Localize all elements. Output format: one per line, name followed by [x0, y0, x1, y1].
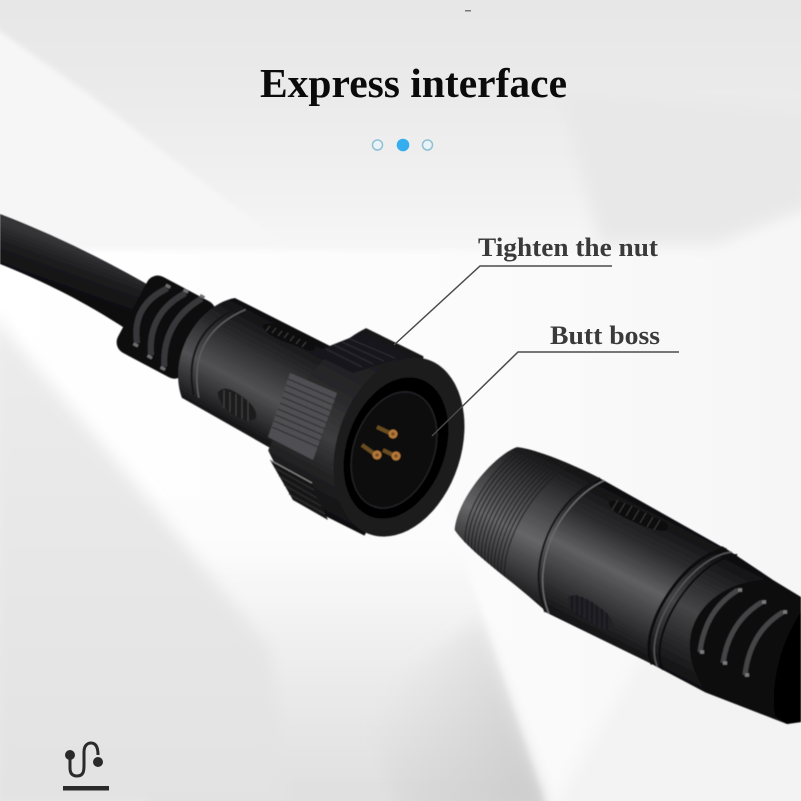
collar rings	[636, 535, 726, 671]
grip top	[609, 501, 668, 531]
nut face	[312, 340, 486, 554]
body grip top	[263, 324, 315, 351]
body grip bottom	[218, 389, 256, 421]
relief ribs	[700, 590, 783, 675]
relief base	[660, 556, 801, 724]
knurl top	[312, 333, 410, 373]
callout: butt boss	[432, 321, 679, 436]
pagination dots	[372, 139, 432, 151]
pins	[362, 427, 400, 460]
body	[516, 469, 729, 672]
callout: tighten the nut	[394, 233, 658, 345]
body	[159, 284, 363, 469]
strain relief	[112, 270, 220, 383]
title: Express interface	[260, 60, 567, 106]
callout: tighten the nut: Tighten the nut	[478, 233, 658, 262]
cable	[0, 214, 152, 329]
grip bottom	[568, 595, 614, 630]
right connector housing	[454, 446, 773, 694]
callout: butt boss: Butt boss	[550, 321, 660, 350]
collar	[634, 533, 776, 696]
knurl lit	[268, 373, 337, 460]
left connector housing	[89, 225, 452, 537]
right connector	[454, 446, 801, 725]
left connector with cable	[0, 214, 486, 554]
knurl bottom	[270, 460, 328, 520]
nut side	[251, 312, 452, 537]
threaded end	[436, 428, 611, 611]
icon: cable	[63, 743, 109, 790]
